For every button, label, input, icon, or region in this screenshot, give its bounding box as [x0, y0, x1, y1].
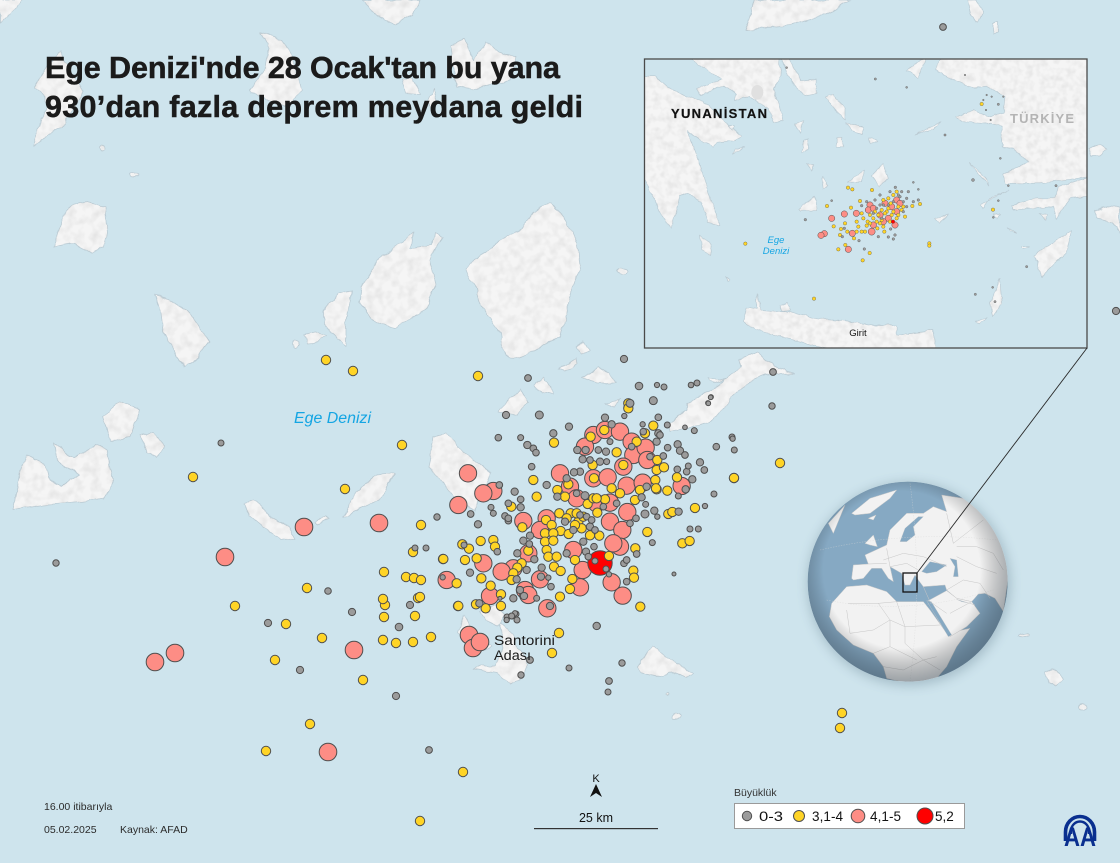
legend: 5,2	[935, 809, 954, 824]
inset label: Yunanistan: YUNANİSTAN	[671, 106, 767, 121]
source notes	[44, 801, 188, 836]
earthquakes magnitude 3.1-4 cluster	[439, 399, 739, 613]
legend: Büyüklük	[734, 787, 777, 799]
north arrow: K	[592, 773, 600, 785]
label: Santorini Adası: Santorini	[494, 633, 555, 648]
globe body	[808, 482, 1008, 683]
globe soft shadow	[808, 483, 1010, 685]
earthquakes magnitude 4.1-5 outliers	[146, 514, 489, 761]
globe locator	[808, 482, 1010, 685]
title	[45, 51, 583, 124]
inset label: Ege Denizi	[763, 235, 790, 257]
scale bar: 25 km	[579, 811, 613, 825]
globe borders	[847, 513, 1003, 670]
north arrow	[590, 773, 602, 797]
inset 0-3 dots	[786, 67, 1057, 303]
source notes: 16.00 itibarıyla	[44, 801, 112, 813]
earthquake magnitude 5.2	[588, 551, 612, 575]
inset label: Türkiye: TÜRKİYE	[1010, 111, 1074, 126]
globe shading	[808, 482, 1008, 682]
globe inland seas	[900, 517, 975, 637]
inset land and quakes	[642, 57, 1090, 351]
legend: 3,1-4	[812, 809, 843, 824]
inset label: Ege Denizi: Denizi	[763, 246, 790, 257]
earthquakes magnitude 0-3 cluster	[440, 395, 737, 630]
inset label: Ege Denizi: Ege	[768, 235, 784, 246]
inset 4.1-5 dots	[818, 197, 903, 252]
legend: 4,1-5	[870, 809, 901, 824]
legend	[734, 787, 964, 828]
label: Santorini Adası: Adası	[494, 648, 531, 663]
inset 5.2 dot	[891, 220, 895, 223]
legend: 0-3	[759, 809, 783, 824]
source notes: 05.02.2025	[44, 824, 97, 836]
AA logo: AA	[1064, 822, 1096, 852]
globe graticule	[820, 483, 997, 682]
label: Santorini Adası	[494, 633, 555, 663]
scale bar	[534, 811, 658, 829]
globe land	[828, 490, 1008, 683]
panel: inset locator map	[642, 57, 1090, 351]
label: Ege Denizi: Ege Denizi	[294, 410, 372, 427]
inset sea	[645, 59, 1087, 348]
earthquakes magnitude 4.1-5 cluster	[438, 421, 690, 617]
earthquakes magnitude 3.1-4 outliers	[188, 355, 847, 826]
inset 3.1-4 dots	[744, 102, 995, 300]
inset land	[642, 57, 1090, 351]
title: Ege Denizi'nde 28 Ocak'tan bu yana	[45, 51, 561, 85]
inset frame	[644, 59, 1087, 348]
Athens urban patch	[751, 85, 763, 100]
leader line from globe to inset	[917, 348, 1087, 573]
inset label: Girit: Girit	[849, 328, 867, 339]
globe location box	[903, 573, 917, 592]
title: 930’dan fazla deprem meydana geldi	[45, 90, 583, 124]
source notes: Kaynak: AFAD	[120, 824, 188, 836]
